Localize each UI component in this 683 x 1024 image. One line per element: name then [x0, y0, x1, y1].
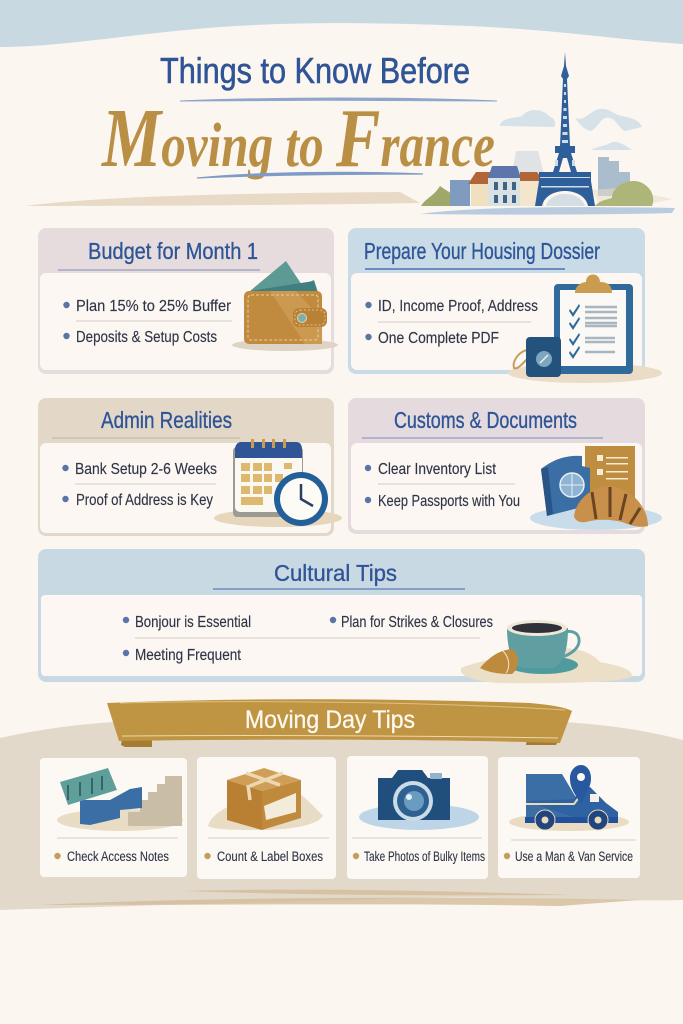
bullet list [62, 461, 217, 509]
row of Parisian houses [468, 166, 544, 206]
title [100, 50, 497, 185]
panel: Prepare Your Housing Dossier [348, 228, 662, 383]
bullet list: Meeting Frequent [135, 647, 241, 664]
tip card: Use a Man & Van Service [498, 757, 640, 878]
panel: Budget for Month 1 [38, 228, 338, 374]
icon: calendar and clock [214, 439, 342, 527]
divider [352, 837, 482, 839]
bullet list: Keep Passports with You [378, 493, 520, 510]
bullet list [63, 298, 232, 346]
icon: clipboard and passport [508, 274, 662, 383]
Eiffel Tower [535, 52, 595, 206]
icon: passport, checklist and croissant [530, 446, 662, 530]
bullet label: Take Photos of Bulky Items [364, 849, 485, 864]
bullet label: Check Access Notes [67, 849, 169, 864]
heading: Budget for Month 1 [88, 238, 258, 264]
trees right [595, 181, 653, 206]
bullet label: Count & Label Boxes [217, 849, 323, 864]
tip card: Count & Label Boxes [197, 757, 336, 879]
bullet list: Clear Inventory List [378, 461, 496, 478]
script underline [197, 172, 423, 178]
bullet list: ID, Income Proof, Address [378, 298, 538, 315]
tip card: Check Access Notes [40, 758, 187, 877]
heading underline [52, 437, 240, 439]
beige lower background [0, 719, 683, 910]
bullet list [365, 461, 520, 510]
divider [208, 837, 329, 839]
panel: Admin Realities [38, 398, 342, 536]
icon: wallet with banknotes [232, 261, 338, 351]
divider [511, 839, 636, 841]
panel: Customs & Documents [348, 398, 662, 534]
bullet list: Plan for Strikes & Closures [341, 614, 493, 631]
bullet list: One Complete PDF [378, 330, 499, 347]
title underline [180, 98, 497, 101]
panel: Cultural Tips [38, 549, 645, 683]
tan brush strokes [40, 890, 640, 906]
tower lattice [540, 84, 590, 188]
far buildings [512, 151, 544, 174]
heading underline [58, 269, 260, 271]
bullet list: Bank Setup 2-6 Weeks [75, 461, 217, 478]
heading: Prepare Your Housing Dossier [364, 238, 600, 264]
title line 2 script: Moving to France [100, 92, 495, 185]
icon: van with location pin [509, 765, 629, 831]
divider [57, 837, 178, 839]
left blue house [450, 180, 470, 206]
tip card: Take Photos of Bulky Items [347, 756, 488, 879]
tan ground stroke [25, 192, 420, 206]
bullet list: Bonjour is Essential [135, 614, 251, 631]
heading underline [365, 268, 565, 270]
heading: Cultural Tips [274, 560, 397, 586]
banner: Moving Day Tips [107, 699, 572, 747]
bullet list [123, 614, 493, 664]
bullet list [365, 298, 538, 347]
bullet label: Use a Man & Van Service [515, 849, 633, 864]
icon: camera [359, 770, 479, 830]
heading: Admin Realities [101, 407, 232, 433]
heading underline [362, 437, 603, 439]
icon: stairs and moving items [57, 768, 183, 831]
illustration: Paris skyline with Eiffel Tower [420, 52, 675, 215]
clouds [500, 109, 642, 150]
icon: cardboard box [208, 768, 323, 830]
title line 1: Things to Know Before [160, 50, 470, 91]
bullet list: Proof of Address is Key [76, 492, 213, 509]
heading underline [213, 588, 465, 590]
heading: Customs & Documents [394, 407, 577, 433]
bullet label [353, 849, 485, 864]
bullet list: Deposits & Setup Costs [76, 329, 217, 346]
banner text: Moving Day Tips [245, 706, 415, 734]
icon: coffee cup and almond [461, 620, 632, 683]
bullet list: Plan 15% to 25% Buffer [76, 298, 232, 315]
trees left [421, 186, 468, 206]
water stroke [420, 207, 675, 215]
top sky band [0, 0, 683, 47]
ground behind tower right [592, 188, 672, 206]
